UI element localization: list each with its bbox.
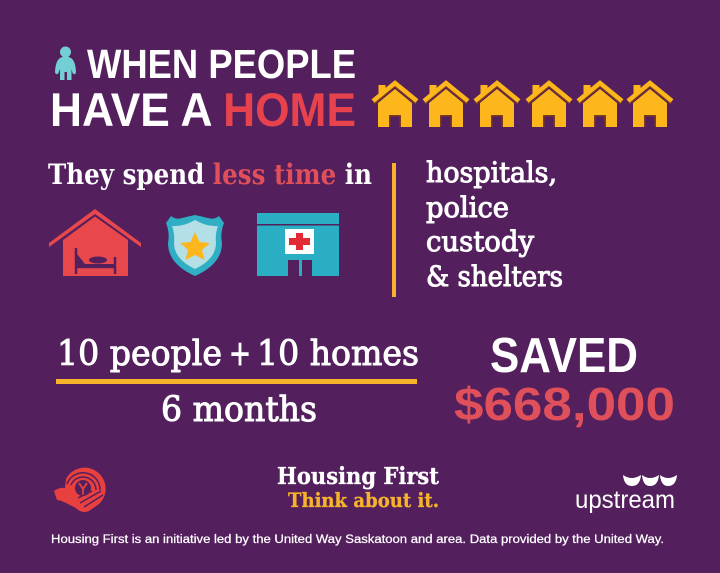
heading: housing first: Housing First bbox=[277, 463, 439, 490]
icon row: six houses bbox=[373, 83, 672, 127]
text: 10 people + 10 homes: + bbox=[229, 334, 251, 374]
icon: shelter with bed bbox=[49, 209, 141, 276]
icon: police badge bbox=[166, 215, 224, 276]
vertical divider bbox=[392, 163, 396, 297]
text: 10 people + 10 homes bbox=[57, 334, 419, 374]
text: institutions list: custody bbox=[426, 225, 534, 258]
text: saved: SAVED bbox=[490, 329, 638, 383]
text: institutions list bbox=[426, 156, 563, 293]
text: they spend less time in: They spend less time in bbox=[48, 158, 372, 191]
text: institutions list: & shelters bbox=[426, 260, 563, 293]
tagline: think about it: Think about it. bbox=[288, 488, 439, 512]
logo: united way bbox=[54, 468, 106, 512]
horizontal divider bbox=[56, 379, 417, 384]
icon: hospital bbox=[257, 213, 339, 276]
title: HAVE A HOME bbox=[50, 83, 356, 136]
icon: person bbox=[55, 46, 76, 80]
text: 10 people + 10 homes: 10 homes bbox=[257, 334, 419, 374]
title: WHEN PEOPLE bbox=[87, 41, 356, 87]
footnote: Housing First is an initiative led by the United Way Saskatoon and area. Data provided by the United Way. bbox=[51, 534, 664, 546]
logo: upstream: upstream bbox=[575, 486, 675, 514]
text: institutions list: police bbox=[426, 191, 509, 224]
text: institutions list: hospitals, bbox=[426, 156, 557, 189]
text: 10 people + 10 homes: 10 people bbox=[57, 334, 222, 374]
title bbox=[50, 41, 356, 136]
text: amount: $668,000 bbox=[454, 378, 675, 430]
text: 6 months: 6 months bbox=[161, 390, 317, 430]
